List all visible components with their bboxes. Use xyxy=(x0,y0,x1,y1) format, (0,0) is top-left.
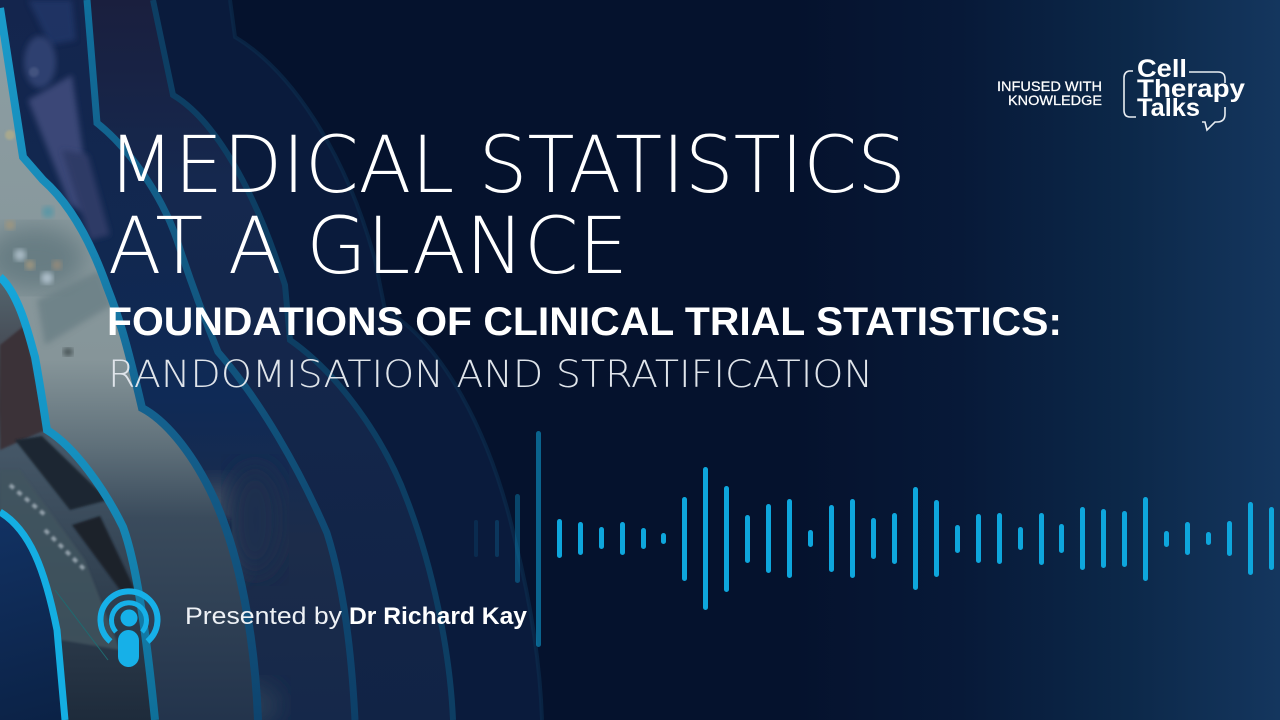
logo: Cell Therapy Talks xyxy=(1124,55,1245,130)
panel: outermost dark layer xyxy=(0,0,542,720)
panel: third layer xyxy=(0,0,453,720)
logo: infused with knowledge tagline: KNOWLEDGE xyxy=(1008,92,1102,108)
presenter line xyxy=(185,603,528,630)
layered wave panels with photo xyxy=(0,0,542,720)
presenter line: Dr Richard Kay xyxy=(349,603,528,630)
subtitle: bold heading: FOUNDATIONS OF CLINICAL TRIAL STATISTICS: xyxy=(107,300,1062,344)
icon: podcast xyxy=(100,591,158,667)
panel: second layer with scan image xyxy=(0,0,355,720)
subtitle: light heading: RANDOMISATION AND STRATIFICATION xyxy=(108,353,873,396)
title xyxy=(108,121,906,292)
panel: front navy layer xyxy=(0,512,65,720)
audio waveform xyxy=(474,431,1274,647)
title: MEDICAL STATISTICS xyxy=(108,121,906,211)
logo: Cell Therapy Talks: Cell xyxy=(1137,55,1187,83)
presenter line: Presented by xyxy=(185,603,342,630)
logo: Cell Therapy Talks: Therapy xyxy=(1137,75,1245,103)
panel: photo layer xyxy=(0,8,258,720)
title: AT A GLANCE xyxy=(108,202,628,292)
panel: device layer xyxy=(0,277,155,720)
logo: infused with knowledge tagline xyxy=(997,78,1102,108)
logo: infused with knowledge tagline: INFUSED WITH xyxy=(997,78,1102,94)
logo: Cell Therapy Talks: Talks xyxy=(1137,94,1200,122)
